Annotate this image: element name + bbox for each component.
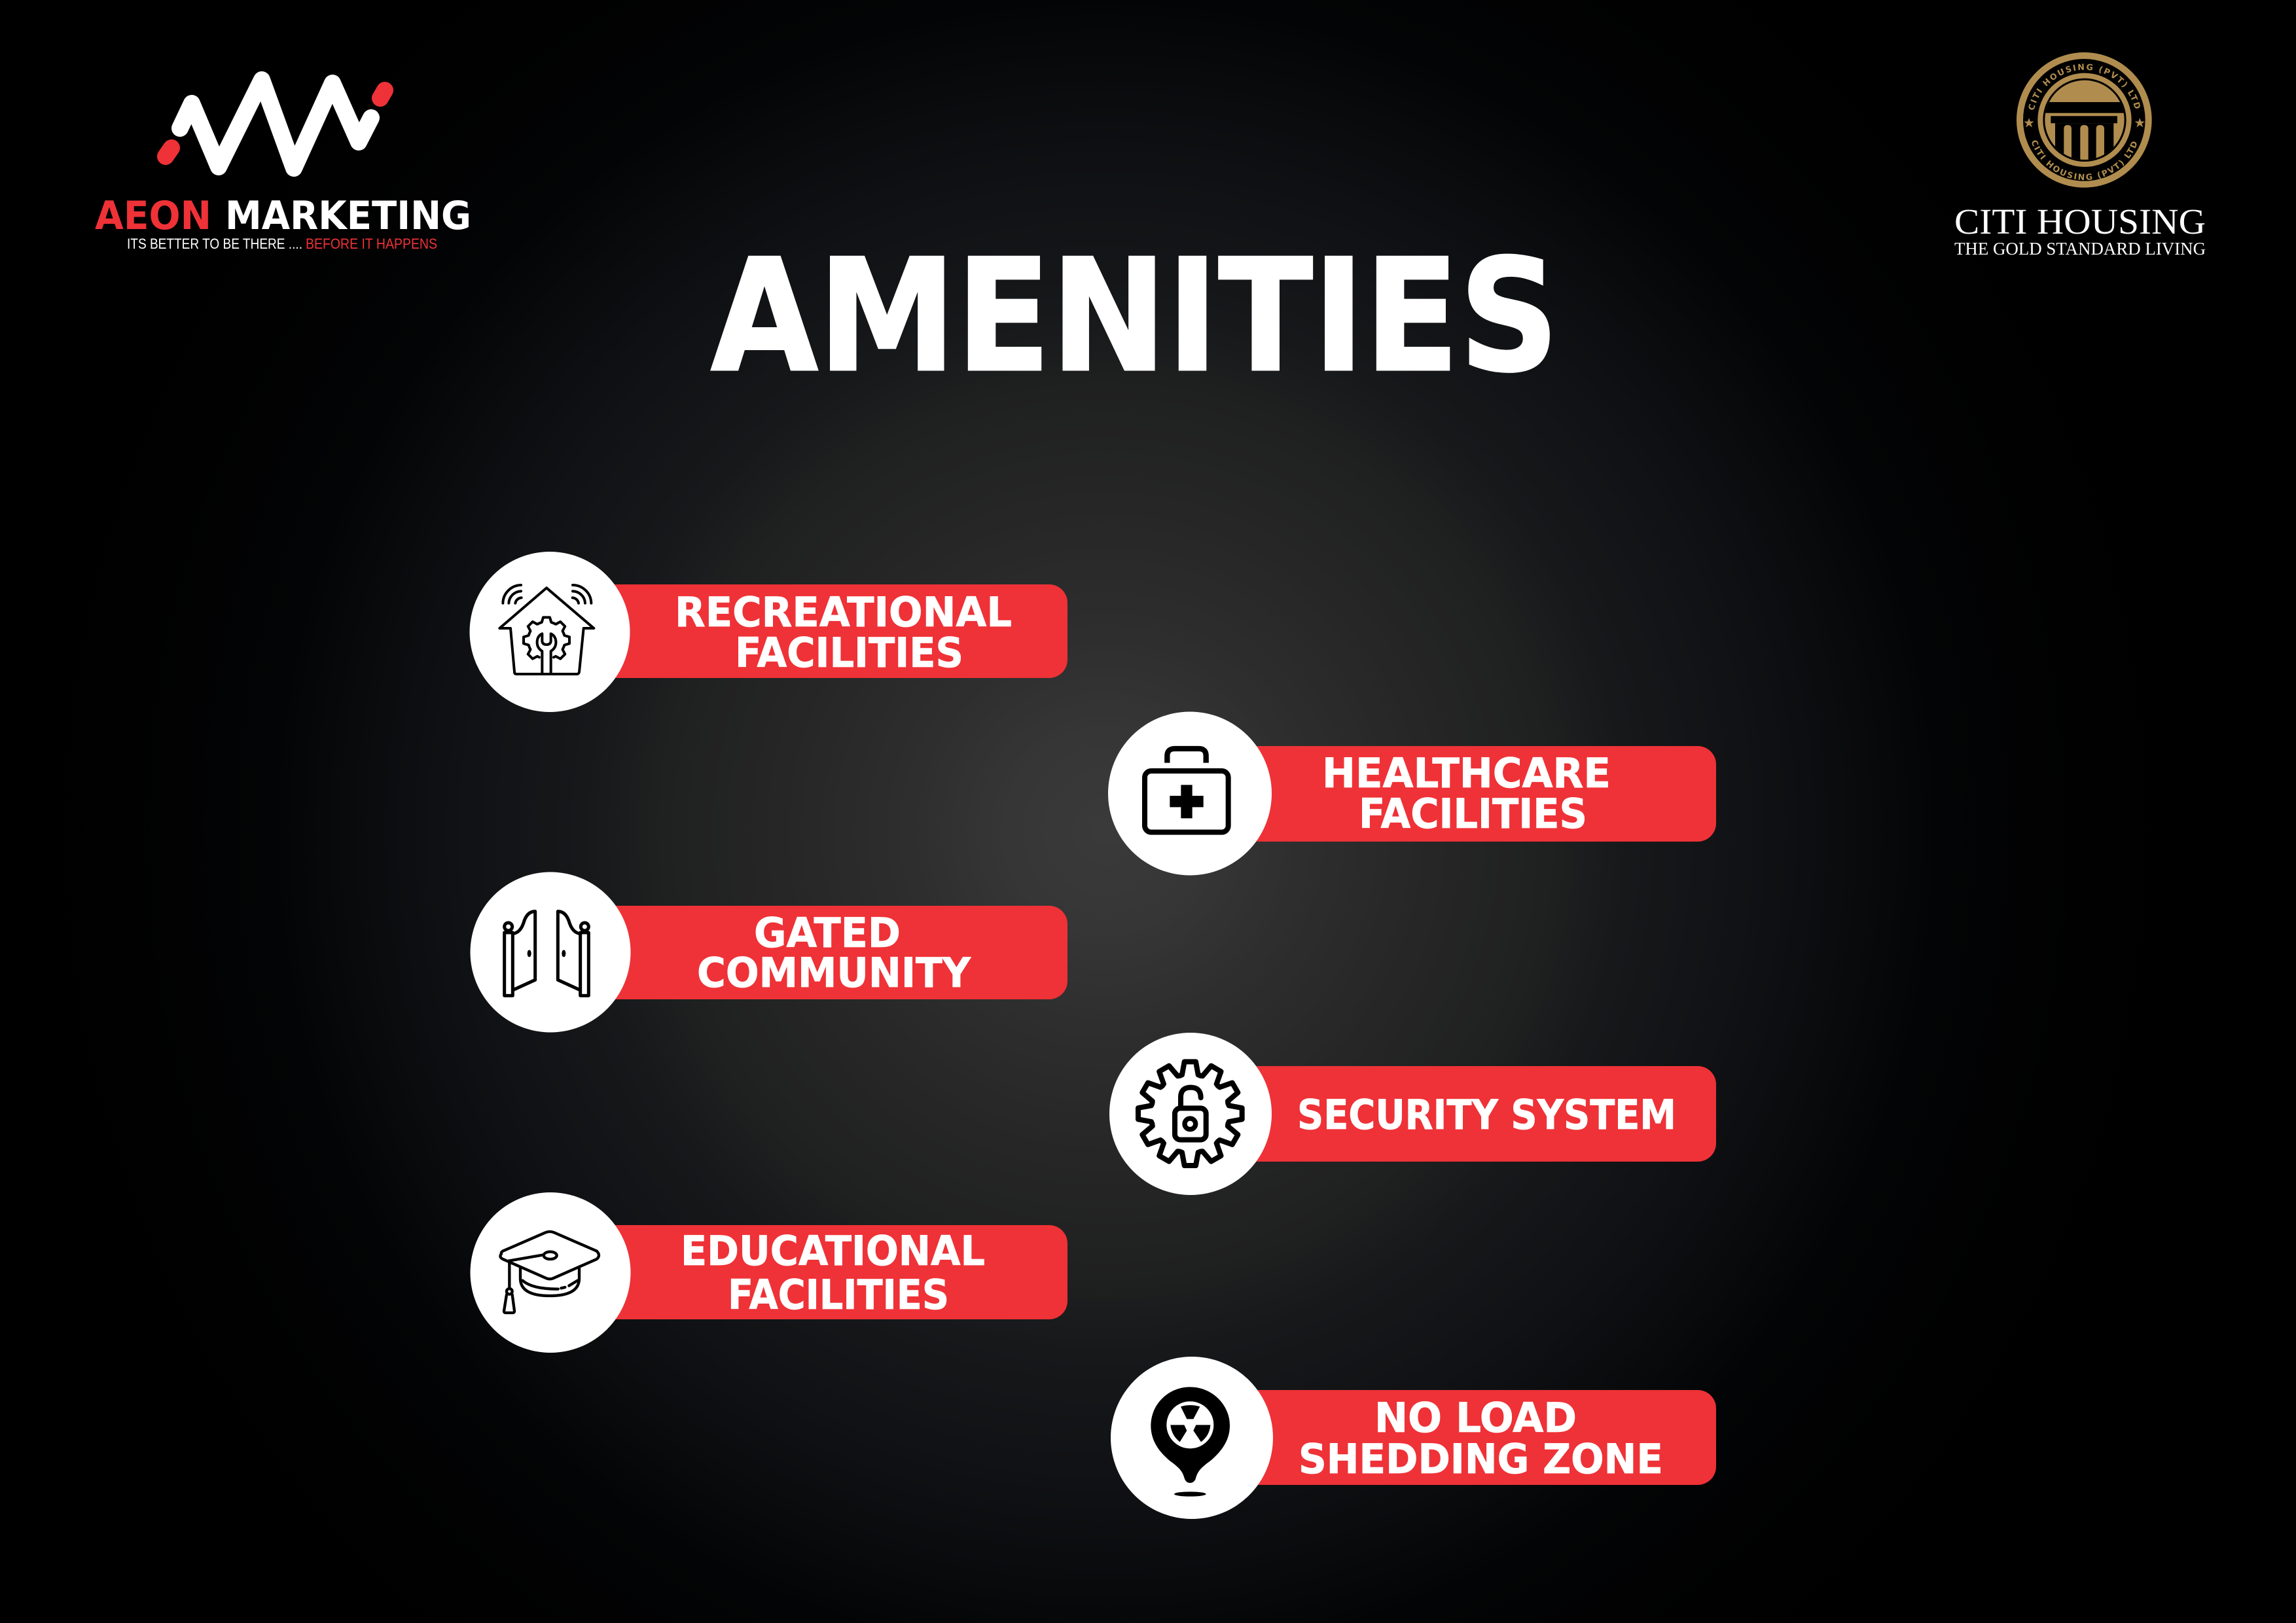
label bar bbox=[1217, 1066, 1716, 1162]
label text: FACILITIES bbox=[728, 1271, 949, 1319]
label bar bbox=[576, 584, 1067, 678]
label text: GATED bbox=[754, 909, 901, 957]
logo tagline bbox=[127, 236, 437, 252]
label bar bbox=[576, 1225, 1067, 1319]
label bar bbox=[1217, 746, 1716, 842]
label text: RECREATIONAL bbox=[675, 588, 1012, 636]
icon circle bbox=[470, 552, 630, 712]
label text bbox=[675, 588, 1012, 677]
logo tagline: ITS BETTER TO BE THERE .... bbox=[127, 236, 302, 252]
label text: COMMUNITY bbox=[697, 949, 971, 997]
logo wordmark: AEON bbox=[95, 193, 211, 239]
icon: map pin with radiation symbol bbox=[1151, 1387, 1230, 1497]
icon circle bbox=[470, 1192, 631, 1353]
emblem: gold seal: CITI HOUSING (PVT) LTD bbox=[2032, 140, 2136, 181]
label text: HEALTHCARE bbox=[1322, 749, 1611, 797]
logo: Citi Housing bbox=[1954, 52, 2206, 259]
label text: NO LOAD bbox=[1374, 1394, 1577, 1442]
emblem: gold seal: CITI HOUSING (PVT) LTD bbox=[2029, 63, 2140, 110]
logo wordmark: MARKETING bbox=[225, 193, 471, 239]
logo tagline: BEFORE IT HAPPENS bbox=[306, 236, 437, 252]
icon circle bbox=[1111, 1357, 1273, 1519]
label text: SHEDDING ZONE bbox=[1299, 1435, 1663, 1483]
icon: lower red pill bbox=[166, 148, 171, 156]
icon circle bbox=[1109, 1033, 1272, 1195]
label text bbox=[1299, 1394, 1663, 1483]
icon circle bbox=[470, 872, 631, 1033]
label text: SECURITY SYSTEM bbox=[1297, 1091, 1676, 1139]
brand name: CITI HOUSING bbox=[1954, 202, 2206, 241]
emblem: gold seal bbox=[2017, 52, 2152, 188]
panel: no load shedding zone bbox=[1111, 1357, 1716, 1519]
icon: smart home with gear and wrench bbox=[499, 585, 594, 674]
icon: first aid kit bbox=[1145, 749, 1229, 832]
label text: FACILITIES bbox=[1359, 790, 1587, 838]
icon: Aeon zigzag wave bbox=[180, 80, 371, 168]
label text: EDUCATIONAL bbox=[681, 1227, 985, 1275]
icon: gear with open padlock bbox=[1138, 1061, 1242, 1166]
logo: Aeon Marketing bbox=[95, 80, 471, 252]
icon: graduation cap bbox=[500, 1232, 599, 1313]
label text bbox=[697, 909, 971, 997]
icon: upper red pill bbox=[380, 90, 385, 98]
panel: recreational facilities bbox=[470, 552, 1067, 712]
title: AMENITIES bbox=[711, 226, 1559, 406]
panel: educational facilities bbox=[470, 1192, 1067, 1353]
brand tagline: THE GOLD STANDARD LIVING bbox=[1954, 239, 2206, 259]
icon: open gate bbox=[505, 912, 588, 995]
panel: gated community bbox=[470, 872, 1067, 1033]
label text: FACILITIES bbox=[735, 629, 963, 677]
logo wordmark bbox=[95, 193, 471, 239]
label text bbox=[1322, 749, 1611, 838]
icon circle bbox=[1108, 712, 1272, 876]
label bar bbox=[576, 906, 1067, 999]
label text bbox=[681, 1227, 985, 1319]
panel: healthcare facilities bbox=[1108, 712, 1716, 876]
panel: security system bbox=[1109, 1033, 1716, 1195]
label bar bbox=[1217, 1390, 1716, 1485]
